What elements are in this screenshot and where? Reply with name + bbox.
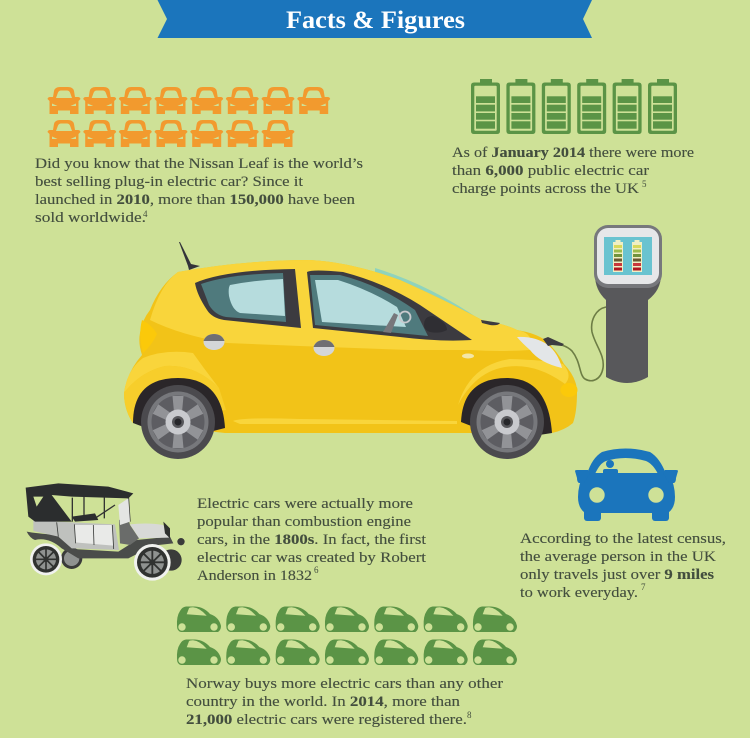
door handles	[204, 334, 224, 350]
text: charge points fact: charge points across the UK	[452, 181, 640, 197]
text: Nissan Leaf fact: launched in 2010 , more than 150,000 have been	[35, 192, 355, 208]
cowl and bonnet	[130, 523, 169, 538]
text: early electric cars fact: Electric cars were actually more	[197, 496, 413, 512]
text: Nissan Leaf fact: 4	[143, 209, 148, 219]
text: early electric cars fact: 6	[314, 565, 319, 575]
rear wheels behind	[61, 548, 82, 569]
text: charge points fact	[452, 145, 694, 197]
text: Nissan Leaf fact: Did you know that the Nissan Leaf is the world’s	[35, 156, 364, 172]
text: Norway fact	[186, 676, 503, 728]
rear light	[140, 320, 157, 353]
icons: batteries	[471, 79, 677, 134]
text: early electric cars fact: Anderson in 1832	[197, 568, 312, 584]
rear window	[195, 269, 301, 328]
front glow	[560, 383, 578, 397]
title: Facts & Figures	[286, 7, 465, 34]
hood folded	[26, 483, 133, 522]
rear wheel	[30, 543, 62, 575]
front wheel	[470, 385, 544, 459]
charging plug	[543, 337, 564, 346]
text: commute fact: According to the latest census,	[520, 531, 726, 547]
icons: orange cars row	[48, 87, 330, 147]
front wheel	[134, 544, 171, 581]
rear fender	[124, 352, 219, 393]
front fender	[458, 359, 569, 405]
icons: green cars	[177, 606, 517, 665]
side marker	[462, 354, 474, 358]
text: early electric cars fact: popular than combustion engine	[197, 514, 411, 530]
steering wheel	[400, 312, 410, 322]
illustration: charging post	[548, 225, 662, 383]
icon: blue car with driver	[575, 448, 678, 521]
text: early electric cars fact	[197, 496, 426, 584]
body	[33, 518, 119, 550]
seat	[424, 316, 447, 333]
text: charge points fact: 5	[642, 179, 647, 189]
rear wheel	[141, 385, 215, 459]
text: commute fact: the average person in the UK	[520, 549, 717, 565]
text: Norway fact: Norway buys more electric cars than any other	[186, 676, 503, 692]
text: commute fact: 7	[641, 582, 646, 592]
wheel arches	[133, 378, 225, 440]
upper body panel	[150, 260, 531, 351]
text: Norway fact: country in the world. In 2014 , more than	[186, 694, 460, 710]
text: Nissan Leaf fact: sold worldwide.	[35, 210, 146, 226]
illustration: vintage car	[26, 483, 185, 581]
text: charge points fact: than 6,000 public electric car	[452, 163, 649, 179]
text: charge points fact: As of January 2014 there were more	[452, 145, 694, 161]
text: Nissan Leaf fact: best selling plug-in electric car? Since it	[35, 174, 303, 190]
text: Norway fact: 21,000 electric cars were registered there.	[186, 712, 467, 728]
front window	[307, 270, 472, 341]
text: commute fact: only travels just over 9 miles	[520, 567, 715, 583]
body	[124, 260, 577, 433]
text: early electric cars fact: electric car was created by Robert	[197, 550, 426, 566]
headlight	[517, 337, 562, 368]
text: early electric cars fact: cars, in the 1800s . In fact, the first	[197, 532, 426, 548]
windscreen frame	[48, 495, 130, 525]
text: commute fact	[520, 531, 726, 601]
chassis	[27, 532, 173, 558]
antenna	[179, 242, 200, 270]
illustration: yellow electric car	[124, 242, 578, 459]
text: Norway fact: 8	[467, 710, 472, 720]
windscreen strip	[375, 268, 482, 322]
text: commute fact: to work everyday.	[520, 585, 638, 601]
wing mirror	[481, 320, 500, 325]
title banner	[158, 0, 592, 38]
sill highlight	[233, 418, 457, 424]
text: Nissan Leaf fact	[35, 156, 364, 226]
